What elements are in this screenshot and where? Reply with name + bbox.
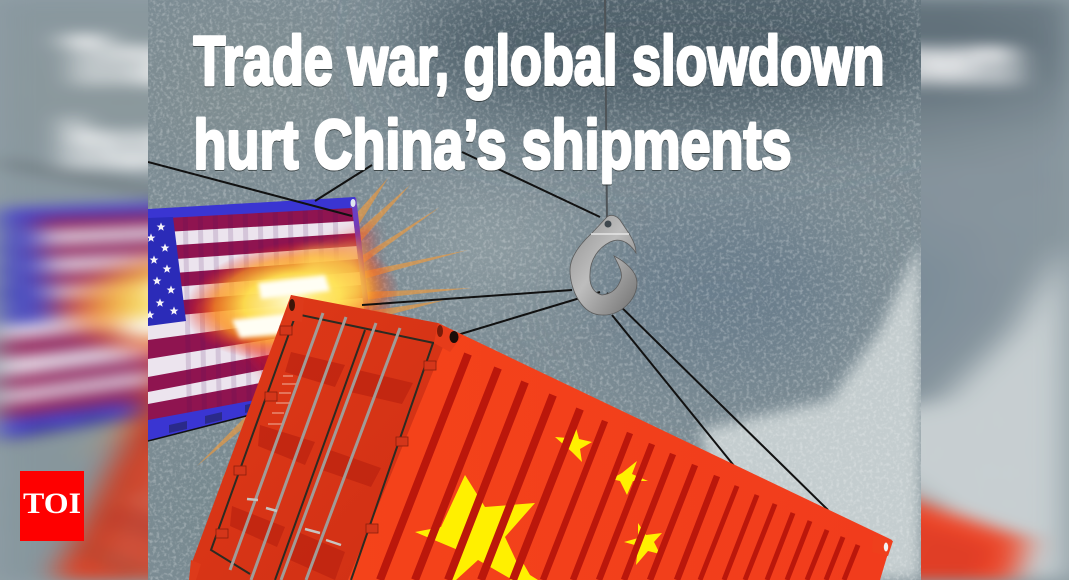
shipping container with US flag <box>146 197 378 441</box>
explosion glow <box>177 225 407 400</box>
flag stripes <box>148 220 372 404</box>
corner casting <box>350 199 356 207</box>
title <box>194 22 884 184</box>
container side wall <box>348 323 892 580</box>
door handles <box>247 499 341 545</box>
flag stars <box>415 424 662 580</box>
corner castings <box>189 295 893 580</box>
container door <box>191 295 450 580</box>
crane wire <box>605 0 607 222</box>
explosion rays <box>197 178 472 482</box>
TOI logo: TOI <box>23 487 81 520</box>
TOI logo <box>20 471 84 541</box>
corrugation grooves <box>380 354 858 580</box>
crane cables <box>148 152 828 510</box>
door hinges <box>216 326 436 538</box>
title: hurt China’s shipments <box>194 106 792 184</box>
door frame <box>211 314 434 580</box>
canton with stars <box>146 217 186 326</box>
door locking bars <box>230 313 400 580</box>
corrugation <box>185 205 341 440</box>
bottom rail vents <box>169 402 258 433</box>
door recessed panels <box>230 352 413 580</box>
crane hook <box>570 215 637 315</box>
door stencil text block <box>268 375 296 425</box>
shipping container with China flag <box>189 295 893 580</box>
central illustration <box>140 0 960 580</box>
concrete background <box>140 0 960 580</box>
